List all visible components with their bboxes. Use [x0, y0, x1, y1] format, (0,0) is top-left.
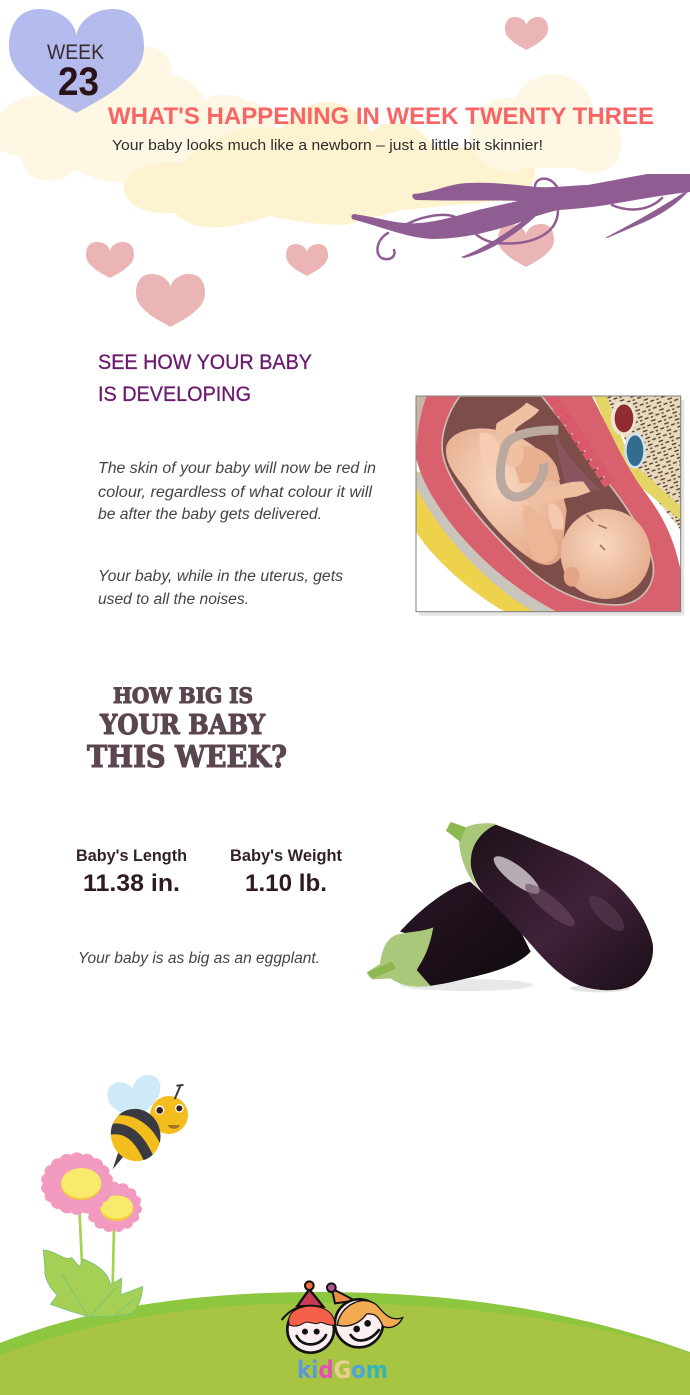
heading: how big: THIS WEEK?	[87, 740, 287, 775]
heart: middle	[286, 244, 328, 276]
text: skin paragraph: be after the baby gets delivered.	[98, 506, 322, 523]
heart: large lower	[136, 274, 205, 327]
week number: 23	[58, 60, 99, 104]
text: noises paragraph: Your baby, while in the uterus, gets	[98, 568, 343, 585]
stat: length: 11.38 in.	[83, 870, 180, 897]
text: skin paragraph	[98, 460, 376, 523]
text: noises paragraph	[98, 568, 343, 608]
flower: front	[40, 1152, 114, 1216]
heart: left	[86, 242, 134, 278]
flower stems	[79, 1208, 114, 1285]
KidGom logo	[282, 1281, 403, 1384]
cloud: light right	[471, 74, 622, 173]
heading: how big: HOW BIG IS	[113, 683, 253, 708]
logo: boy face	[282, 1281, 335, 1353]
title: WHAT'S HAPPENING IN WEEK TWENTY THREE	[108, 103, 654, 130]
logo: girl face	[327, 1283, 403, 1347]
heart: behind branch	[498, 224, 554, 267]
branch	[351, 174, 690, 259]
fetus illustration	[416, 396, 684, 616]
flowers and bee	[40, 1075, 188, 1317]
heading: how big: YOUR BABY	[99, 710, 266, 741]
week badge heart	[9, 9, 144, 113]
stat: weight: Baby's Weight	[230, 847, 342, 865]
week label: WEEK	[47, 41, 104, 64]
logo: wordmark: kidGom	[297, 1356, 388, 1384]
stat: length: Baby's Length	[76, 847, 187, 865]
eggplant image	[367, 822, 653, 992]
cloud: light left	[0, 30, 280, 183]
subtitle: Your baby looks much like a newborn – just a little bit skinnier!	[112, 137, 543, 154]
stat: weight	[230, 847, 342, 897]
heading: development	[98, 351, 312, 406]
stat: length	[76, 847, 187, 897]
flower leaves	[43, 1250, 143, 1317]
heading: development: SEE HOW YOUR BABY	[98, 351, 312, 374]
stat: weight: 1.10 lb.	[245, 870, 327, 897]
cloud: cream centre	[124, 102, 535, 228]
heart: top	[505, 17, 548, 50]
heading: how big	[87, 683, 287, 775]
background clouds	[0, 30, 622, 228]
text: skin paragraph: The skin of your baby will now be red in	[98, 460, 376, 477]
heading: development: IS DEVELOPING	[98, 383, 251, 406]
bee	[103, 1075, 188, 1169]
flower: rear	[84, 1181, 143, 1233]
hill	[0, 1292, 690, 1395]
text: skin paragraph: colour, regardless of what colour it will	[98, 484, 373, 501]
text: noises paragraph: used to all the noises.	[98, 591, 249, 608]
text: size comparison: Your baby is as big as an eggplant.	[78, 950, 320, 967]
